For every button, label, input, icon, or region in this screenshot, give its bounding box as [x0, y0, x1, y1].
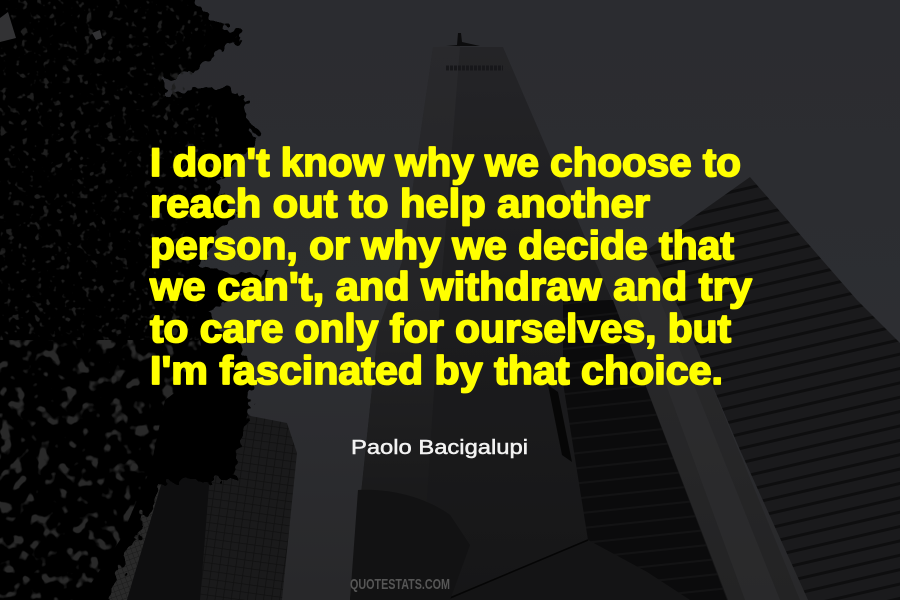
quote line 4: we can't, and withdraw and try: [149, 265, 753, 309]
lower left building: [60, 400, 297, 600]
quote line 6: I'm fascinated by that choice.: [150, 349, 723, 393]
quote line 3: person, or why we decide that: [150, 224, 734, 268]
quote line 5: to care only for ourselves, but: [150, 307, 731, 351]
right striped building: [647, 177, 900, 600]
main tower: [350, 33, 735, 600]
watermark: QUOTESTATS.COM: [350, 576, 450, 593]
lower center building: [350, 490, 470, 600]
quote text: [149, 141, 753, 393]
quote line 1: I don't know why we choose to: [150, 141, 741, 185]
corner sky gaps: [0, 12, 102, 42]
author name: Paolo Bacigalupi: [351, 437, 528, 459]
leaf texture, upper tree: [0, 0, 230, 340]
quote line 2: reach out to help another: [150, 182, 650, 226]
leaf texture, lower tree: [0, 340, 210, 600]
tree silhouette: [0, 0, 270, 600]
light tower edge strip: [590, 250, 800, 600]
